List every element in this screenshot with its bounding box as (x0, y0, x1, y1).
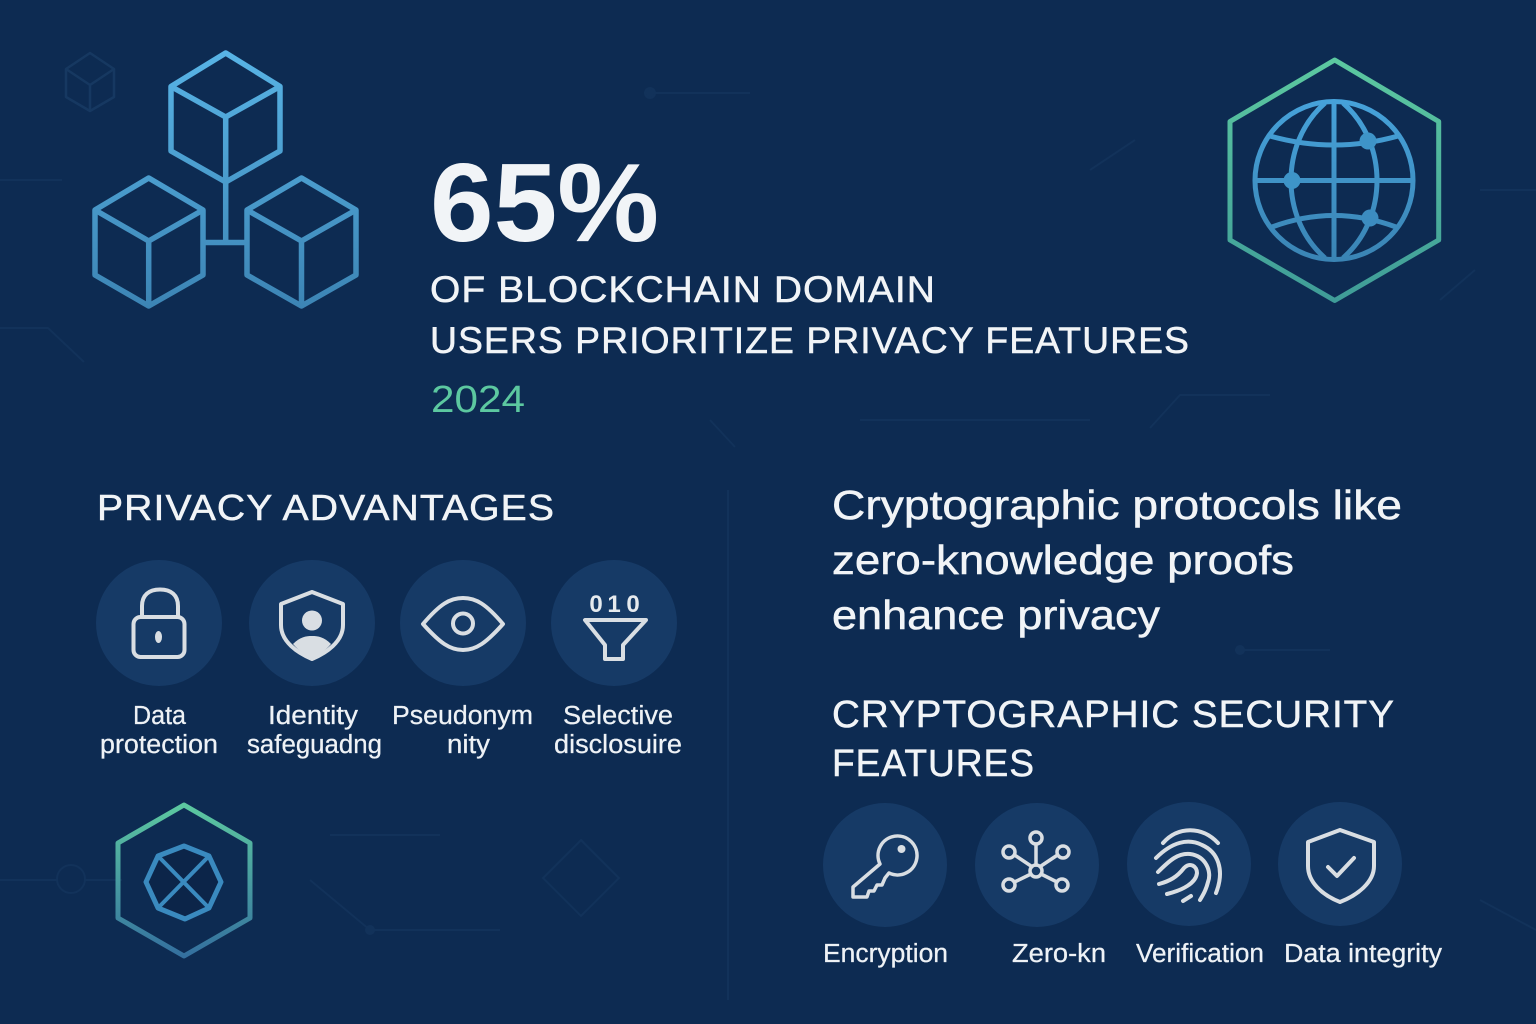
item: verification: Verification (1136, 940, 1264, 968)
item: selective disclosure: Selective (563, 702, 673, 730)
item: pseudonymity: nity (447, 731, 490, 759)
heading: cryptographic security features (832, 694, 1395, 785)
item: data protection: Data (133, 702, 187, 730)
year: 2024 (431, 379, 525, 421)
panel: cryptographic security features (823, 802, 1442, 968)
heading: cryptographic security features: CRYPTOGRAPHIC SECURITY (832, 694, 1395, 736)
panel: privacy advantages (96, 560, 682, 759)
item: selective disclosure: disclosuire (554, 731, 682, 759)
icon: globe in hexagon (1230, 60, 1439, 300)
item: selective disclosure (551, 560, 682, 759)
item: selective disclosure: 010 (589, 591, 640, 618)
heading: cryptographic security features: FEATURES (832, 743, 1035, 785)
statement: cryptographic protocols (832, 482, 1402, 638)
item: zero-knowledge (975, 803, 1106, 968)
item: encryption: Encryption (823, 940, 948, 968)
icon: octagon in hexagon (118, 805, 250, 956)
item: data protection: protection (100, 731, 218, 759)
item: zero-knowledge: Zero-kn (1012, 940, 1106, 968)
item: data integrity: Data integrity (1284, 940, 1442, 968)
statement: cryptographic protocols: zero-knowledge proofs (832, 537, 1294, 583)
item: data protection (96, 560, 222, 759)
statement: cryptographic protocols: enhance privacy (832, 592, 1161, 638)
item: encryption (823, 803, 948, 968)
item: pseudonymity: Pseudonym (392, 702, 533, 730)
headline statistic: 65% (430, 141, 659, 265)
item: identity safeguarding: safeguadng (247, 731, 382, 759)
headline description: USERS PRIORITIZE PRIVACY FEATURES (430, 320, 1190, 361)
icon: blockchain cubes (95, 53, 356, 306)
item: identity safeguarding (247, 560, 382, 759)
statement: cryptographic protocols: Cryptographic protocols like (832, 482, 1402, 528)
heading: privacy advantages: PRIVACY ADVANTAGES (97, 487, 555, 528)
icon: faint cube (66, 53, 114, 111)
item: verification (1127, 802, 1264, 968)
item: pseudonymity (392, 560, 533, 759)
headline description: OF BLOCKCHAIN DOMAIN (430, 269, 936, 310)
headline description (430, 269, 1190, 361)
item: data integrity (1278, 802, 1442, 968)
item: identity safeguarding: Identity (268, 702, 358, 730)
